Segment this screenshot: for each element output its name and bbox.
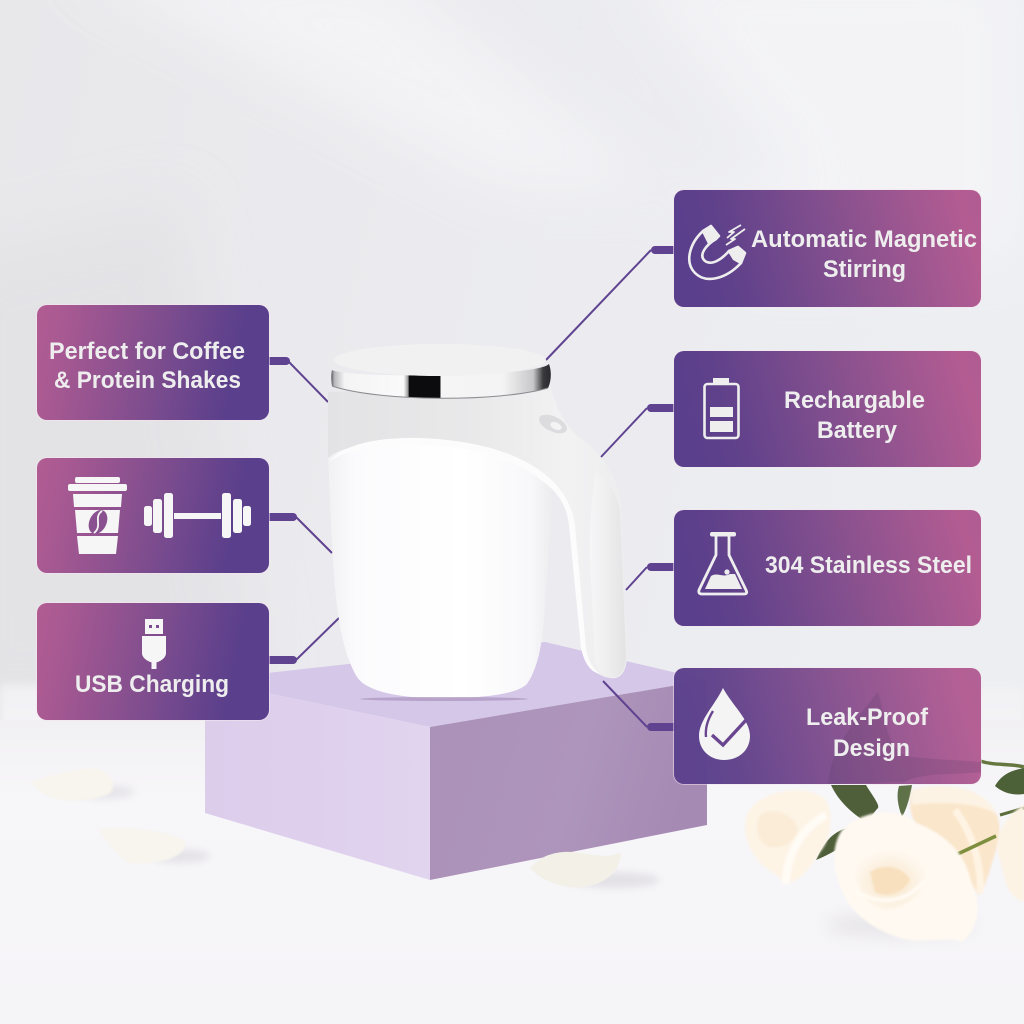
icon: coffee cup <box>68 477 127 554</box>
label text: Automatic Magnetic <box>751 226 977 253</box>
purple display block <box>205 642 707 880</box>
rose left <box>745 790 831 884</box>
icon: magnet <box>689 225 745 279</box>
panel: 304 stainless steel <box>673 509 982 627</box>
panel: usb charging <box>36 602 270 721</box>
connector lines <box>269 250 674 727</box>
panel: perfect for coffee and protein shakes <box>36 304 270 421</box>
product: white magnetic stirring mug <box>328 344 627 701</box>
label text: Rechargable <box>784 387 925 414</box>
icon: dumbbell <box>144 493 251 538</box>
panel: automatic magnetic stirring <box>673 189 982 308</box>
fallen petals <box>30 768 660 888</box>
label text <box>806 704 929 762</box>
mug button <box>536 411 570 437</box>
icon: usb plug <box>142 619 166 669</box>
label text: Perfect for Coffee <box>49 338 245 365</box>
rose back right <box>910 786 1000 895</box>
icon: battery <box>704 378 738 438</box>
mug lid <box>334 344 546 376</box>
label text: Stirring <box>823 256 906 283</box>
handle face shading <box>590 470 626 677</box>
rose shadow seen through panel <box>828 692 981 784</box>
stems and leaves <box>816 761 1024 860</box>
icon: flask <box>699 532 747 594</box>
white rim under collar running into handle <box>329 438 600 674</box>
mug collar and handle <box>328 385 627 678</box>
panel: coffee and dumbbell icons <box>36 457 270 574</box>
roses <box>745 761 1024 942</box>
label text <box>49 338 245 394</box>
stem across <box>945 836 996 860</box>
label text: USB Charging <box>75 671 229 698</box>
label text: 304 Stainless Steel <box>765 552 972 579</box>
label text: Leak-Proof <box>806 704 929 731</box>
mug body <box>328 438 553 698</box>
label text: Design <box>833 735 910 762</box>
rose far right <box>998 805 1024 902</box>
icon: water drop with check <box>699 688 750 760</box>
steel band <box>331 364 551 398</box>
panel: rechargeable battery <box>673 350 982 468</box>
label text: Battery <box>817 417 897 444</box>
label text <box>751 226 977 283</box>
label text: & Protein Shakes <box>54 367 241 394</box>
panel: leak-proof design <box>673 667 982 785</box>
label text <box>784 387 925 444</box>
rose front <box>834 812 977 942</box>
